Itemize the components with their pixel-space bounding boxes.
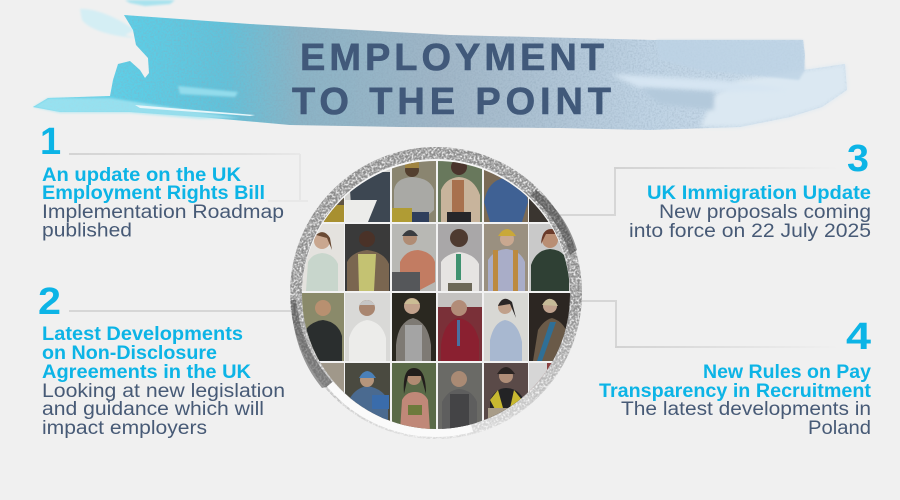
connector 3 bbox=[560, 167, 840, 216]
heading 1 bbox=[42, 165, 265, 204]
text 2 bbox=[42, 381, 285, 439]
heading 2: Agreements in the UK bbox=[42, 362, 251, 383]
number 3: 3 bbox=[847, 138, 869, 180]
block 4: Pay Transparency bbox=[599, 316, 872, 439]
text 1: Implementation Roadmap bbox=[42, 202, 284, 223]
textured ring bbox=[290, 147, 582, 439]
text 3: New proposals coming bbox=[659, 202, 871, 223]
worker portrait grid bbox=[298, 155, 574, 432]
row 4 portraits bbox=[320, 363, 552, 429]
block 2: Non-Disclosure Agreements bbox=[38, 281, 285, 439]
text 2: and guidance which will bbox=[42, 399, 264, 420]
number 2: 2 bbox=[38, 281, 61, 323]
heading 3: UK Immigration Update bbox=[647, 183, 871, 204]
heading 4 bbox=[599, 362, 872, 402]
title bbox=[292, 37, 611, 123]
text 3: into force on 22 July 2025 bbox=[629, 221, 871, 242]
block 3: UK Immigration Update bbox=[629, 138, 871, 242]
number 1: 1 bbox=[40, 121, 61, 163]
text 4: Poland bbox=[808, 418, 871, 439]
heading 1: Employment Rights Bill bbox=[42, 183, 265, 204]
heading 4: New Rules on Pay bbox=[703, 362, 871, 383]
title: TO THE POINT bbox=[292, 81, 611, 123]
block 1: UK Employment Rights Bill bbox=[40, 121, 284, 242]
connector 1 bbox=[69, 153, 308, 202]
heading 2: Latest Developments bbox=[42, 324, 243, 345]
row 3 portraits bbox=[299, 293, 574, 361]
text 3 bbox=[629, 202, 871, 242]
text 1 bbox=[42, 202, 284, 242]
heading 2: on Non-Disclosure bbox=[42, 343, 217, 364]
heading 2 bbox=[42, 324, 251, 383]
heading 4: Transparency in Recruitment bbox=[599, 381, 872, 402]
row 2 portraits bbox=[299, 224, 574, 291]
row 1 portraits bbox=[324, 161, 548, 222]
text 2: impact employers bbox=[42, 418, 207, 439]
text 1: published bbox=[42, 220, 132, 242]
title: EMPLOYMENT bbox=[300, 37, 604, 79]
text 4: The latest developments in bbox=[621, 399, 871, 420]
text 2: Looking at new legislation bbox=[42, 381, 285, 402]
brush stroke banner bbox=[33, 0, 847, 130]
heading 1: An update on the UK bbox=[42, 165, 241, 186]
number 4: 4 bbox=[846, 316, 871, 358]
connector 2 bbox=[69, 310, 301, 350]
photo circle bbox=[290, 147, 582, 439]
text 4 bbox=[621, 399, 871, 439]
connector 4 bbox=[570, 300, 840, 348]
